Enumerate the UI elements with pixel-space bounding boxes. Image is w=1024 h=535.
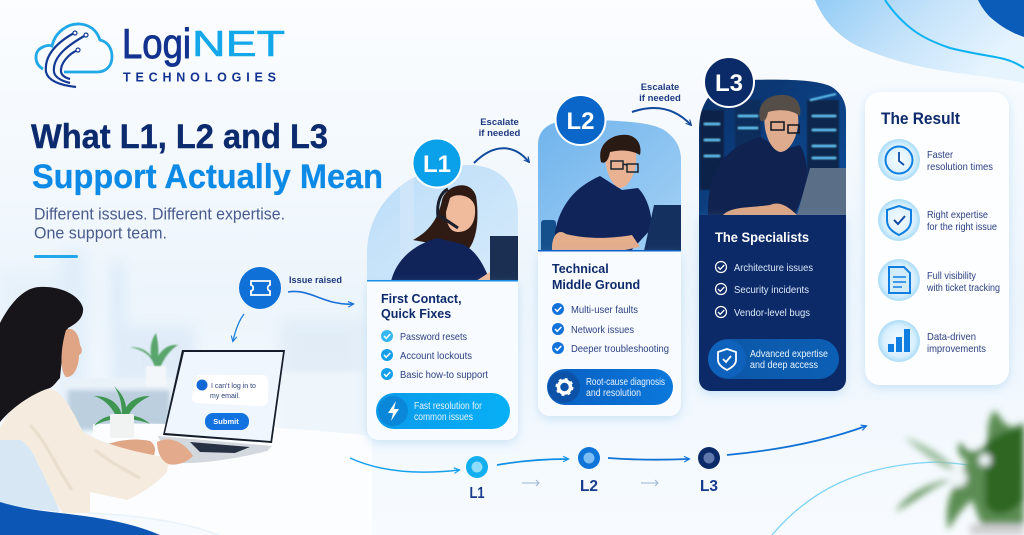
sweater bbox=[0, 388, 170, 513]
L2 list: Deeper troubleshooting bbox=[571, 343, 669, 355]
L3 list bbox=[716, 262, 813, 319]
L2 hair bbox=[600, 135, 640, 163]
escalate arrow bbox=[632, 108, 691, 125]
L1 list: Password resets bbox=[400, 331, 467, 343]
L1 agent hair bbox=[413, 185, 477, 250]
logo NET: NET bbox=[192, 23, 285, 64]
L1 pill: common issues bbox=[414, 412, 473, 423]
escalate note L2 to L3 bbox=[632, 82, 691, 125]
subtitle bbox=[34, 206, 285, 242]
decorative lower right line bbox=[772, 462, 990, 535]
L1 node: L1 bbox=[470, 485, 485, 502]
L3 face bbox=[764, 106, 798, 152]
L1 list: Account lockouts bbox=[400, 350, 472, 362]
submit button bbox=[205, 413, 249, 430]
panel: L3 bbox=[697, 57, 848, 391]
L1 headset bbox=[438, 189, 458, 228]
L2 pill: and resolution bbox=[586, 388, 641, 399]
L3 badge bbox=[704, 57, 754, 107]
L1 agent polo bbox=[391, 238, 490, 281]
title accent rule bbox=[34, 255, 78, 258]
small arrow two bbox=[641, 480, 658, 486]
L1 badge: L1 bbox=[423, 151, 451, 178]
chair bbox=[0, 440, 60, 512]
back hand bbox=[108, 440, 156, 456]
desk bbox=[92, 424, 370, 440]
L1 heading: Quick Fixes bbox=[381, 307, 451, 321]
L1 badge bbox=[412, 138, 462, 188]
L2 badge: L2 bbox=[566, 108, 595, 135]
result: right expertise bbox=[878, 199, 997, 241]
blue corner wave bbox=[0, 502, 160, 535]
title: Support Actually Mean bbox=[32, 158, 383, 196]
issue raised label: Issue raised bbox=[289, 275, 342, 286]
result: full visibility: Full visibility bbox=[927, 270, 977, 282]
L2 list bbox=[552, 303, 669, 355]
chat text: I can't log in to bbox=[211, 383, 256, 390]
panel: L1 bbox=[365, 138, 521, 440]
result: right expertise: for the right issue bbox=[927, 221, 997, 233]
keyboard bbox=[190, 442, 250, 453]
L2 polo bbox=[555, 176, 652, 252]
L3 list: Security incidents bbox=[734, 284, 809, 296]
L1 agent arm bbox=[478, 272, 490, 280]
L2 card top edge bbox=[538, 250, 681, 252]
L3 shirt bbox=[708, 137, 807, 215]
L2 pill: Root-cause diagnosis bbox=[586, 377, 665, 388]
escalate note L1 to L2 bbox=[474, 117, 529, 163]
laptop screen bbox=[165, 352, 283, 441]
result: data driven bbox=[878, 320, 986, 362]
L3 laptop bbox=[797, 168, 846, 215]
escalate note L2 to L3: Escalate bbox=[641, 82, 679, 93]
result: faster resolution bbox=[878, 139, 993, 181]
ticket bubble icon bbox=[239, 267, 281, 309]
L1 heading: First Contact, bbox=[381, 292, 462, 306]
L2 node bbox=[578, 447, 600, 495]
laptop bbox=[158, 350, 285, 463]
L1 card top edge bbox=[367, 280, 518, 282]
escalate arrow bbox=[474, 148, 529, 163]
L2 chair bbox=[541, 220, 556, 252]
L2 laptop bbox=[644, 205, 681, 251]
L1 node bbox=[466, 456, 488, 502]
L3 hair bbox=[759, 95, 800, 121]
L3 list: Architecture issues bbox=[734, 262, 813, 274]
escalate note L1 to L2: Escalate bbox=[480, 117, 519, 128]
L3 pill: Advanced expertise bbox=[750, 349, 828, 360]
L1 card body bbox=[367, 281, 518, 440]
logo wordmark: Logi bbox=[122, 20, 191, 67]
L2 arm bbox=[552, 232, 640, 250]
result heading: The Result bbox=[881, 110, 960, 128]
L1 list bbox=[381, 330, 488, 381]
L2 to L3 arrow bbox=[608, 458, 689, 460]
L2 list: Network issues bbox=[571, 324, 634, 336]
blurred plant bbox=[895, 410, 1024, 535]
L1 pill: Fast resolution for bbox=[414, 401, 483, 412]
panel: L2 bbox=[536, 95, 684, 416]
L2 card body bbox=[538, 251, 681, 416]
L3 arm bbox=[723, 203, 797, 215]
result: full visibility bbox=[878, 259, 1000, 301]
L2 heading: Middle Ground bbox=[552, 278, 640, 292]
arrow to laptop bbox=[233, 314, 244, 341]
title bbox=[31, 118, 383, 196]
chat text: my email. bbox=[210, 393, 240, 400]
front hand bbox=[157, 439, 193, 465]
L3 node bbox=[698, 447, 720, 495]
result: data driven: Data-driven bbox=[927, 331, 976, 343]
blurred office furniture bbox=[64, 333, 370, 434]
L2 glasses bbox=[611, 161, 638, 172]
L3 list: Vendor-level bugs bbox=[734, 307, 810, 319]
logo tagline: TECHNOLOGIES bbox=[123, 70, 276, 84]
chat bubble bbox=[192, 375, 268, 406]
result card bbox=[865, 92, 1009, 385]
L3 pill bbox=[708, 339, 839, 379]
sweater shading bbox=[30, 425, 140, 490]
issue raised marker bbox=[233, 267, 353, 341]
L1 agent face bbox=[446, 195, 475, 232]
submit label: Submit bbox=[213, 417, 239, 426]
L3 photo bbox=[697, 78, 848, 217]
result: data driven: improvements bbox=[927, 343, 986, 355]
L3 heading: The Specialists bbox=[715, 229, 809, 245]
panel: the result bbox=[865, 92, 1009, 385]
L1 to L2 arrow bbox=[497, 459, 568, 465]
result: full visibility: with ticket tracking bbox=[926, 282, 1000, 294]
face bbox=[62, 329, 82, 377]
result: faster resolution: Faster bbox=[927, 149, 953, 161]
logo bbox=[36, 20, 285, 87]
L3 node: L3 bbox=[700, 478, 718, 495]
L3 pill: and deep access bbox=[750, 360, 818, 371]
result: faster resolution: resolution times bbox=[927, 161, 993, 173]
laptop base bbox=[158, 436, 272, 463]
L2 list: Multi-user faults bbox=[571, 304, 638, 316]
subtitle: Different issues. Different expertise. bbox=[34, 206, 285, 224]
subtitle: One support team. bbox=[34, 224, 167, 242]
L3 glasses bbox=[771, 122, 799, 133]
L2 badge bbox=[556, 95, 606, 145]
office scene with woman at laptop bbox=[0, 287, 372, 535]
L3 badge: L3 bbox=[715, 70, 743, 97]
laptop lid bbox=[163, 350, 285, 443]
L2 photo bbox=[536, 118, 684, 253]
small arrow one bbox=[522, 480, 539, 486]
L1 photo bbox=[367, 165, 518, 280]
timeline bbox=[350, 426, 866, 502]
L2 pill bbox=[547, 369, 673, 405]
decorative top right wave shapes bbox=[815, 0, 1024, 83]
logo cloud icon bbox=[36, 24, 112, 87]
L1 pill bbox=[376, 393, 510, 429]
L2 heading: Technical bbox=[552, 262, 609, 276]
L1 monitor bbox=[490, 236, 518, 281]
arrow to first card bbox=[288, 291, 353, 304]
L2 face bbox=[605, 146, 636, 188]
L3 server racks bbox=[700, 94, 839, 190]
desk plant bbox=[94, 386, 150, 438]
escalate note L1 to L2: if needed bbox=[479, 128, 521, 139]
L3 card body bbox=[699, 215, 846, 391]
user icon bbox=[196, 380, 208, 390]
L3 onward arrow bbox=[727, 426, 866, 455]
escalate note L2 to L3: if needed bbox=[639, 93, 681, 104]
L2 node: L2 bbox=[580, 478, 598, 495]
L1 list: Basic how-to support bbox=[400, 369, 488, 381]
title: What L1, L2 and L3 bbox=[31, 118, 328, 156]
result: right expertise: Right expertise bbox=[927, 209, 988, 221]
hair bbox=[0, 287, 83, 422]
lead-in arrow bbox=[350, 458, 459, 472]
